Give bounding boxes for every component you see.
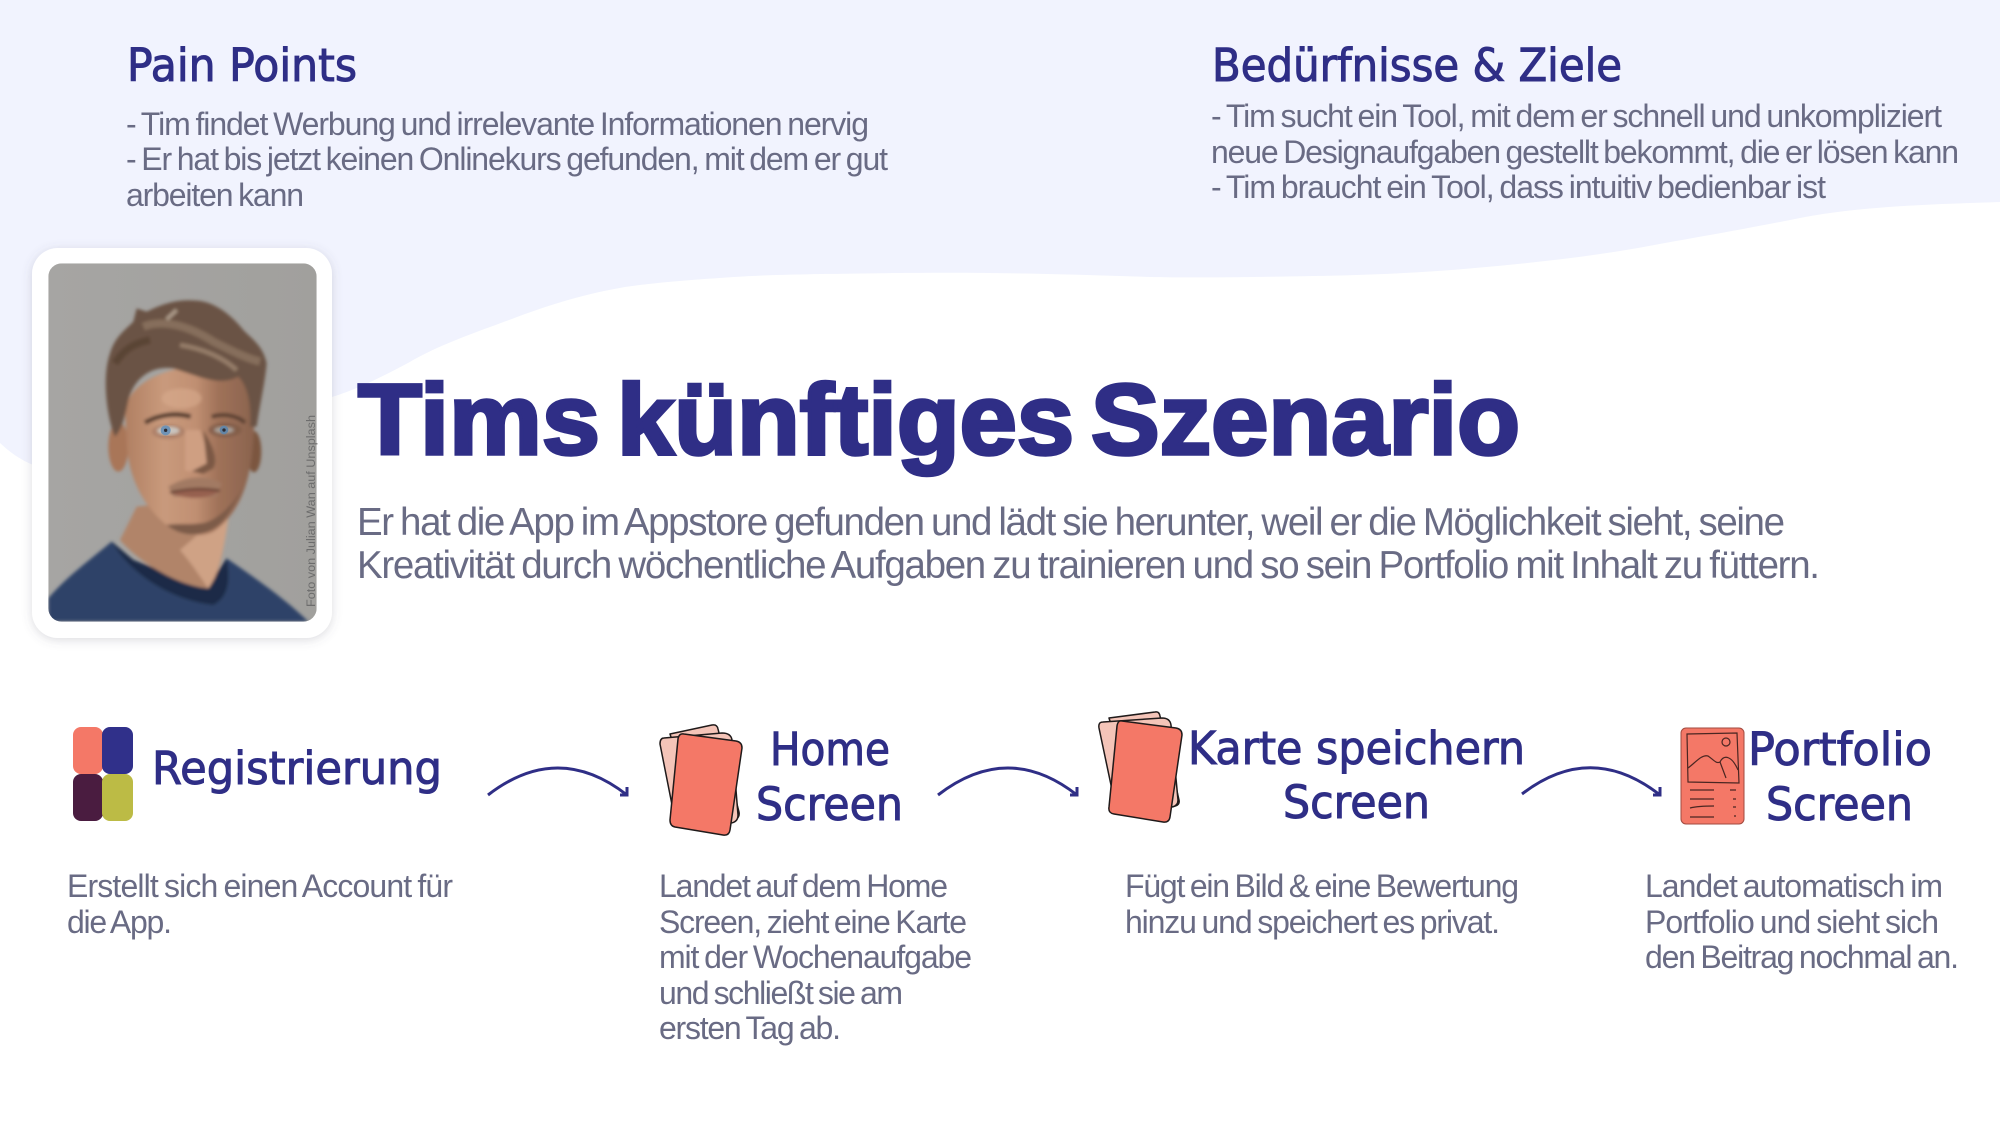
persona photo card [32,248,332,638]
step 1: Registrierung [67,727,453,940]
title: künftiges [617,364,1074,476]
shirt [48,542,308,622]
heading: Home Screen: Home [770,723,890,776]
heading: pain points: Pain Points [127,39,357,92]
text block: needs and goals: neue Designaufgaben gestellt bekommt, die er lösen kann [1211,134,1959,170]
icon: card stack [1099,712,1182,822]
description: Landet automatisch im [1645,868,1943,904]
description: Fügt ein Bild & eine Bewertung [1125,868,1519,904]
eyes [157,426,234,435]
forehead light [162,388,202,408]
heading: Portfolio Screen [1748,723,1932,831]
ears [108,422,128,472]
description: mit der Wochenaufgabe [659,939,972,975]
heading: Karte speichern Screen: Karte speichern [1188,722,1525,775]
text block: pain points: - Er hat bis jetzt keinen Onlinekurs gefunden, mit dem er gut [126,141,888,177]
description: Landet auf dem Home [659,868,948,904]
step 4: Portfolio Screen [1645,723,1959,975]
stubble and jaw shadow [166,498,238,536]
panel: needs and goals [1211,39,1959,205]
text block: needs and goals: - Tim braucht ein Tool, dass intuitiv bedienbar ist [1211,169,1826,205]
heading: Karte speichern Screen [1188,722,1525,829]
background wave [0,0,2000,470]
arrow 3 [1522,768,1660,795]
heading: Portfolio Screen: Portfolio [1748,723,1932,776]
description [659,868,972,1046]
description: den Beitrag nochmal an. [1645,939,1959,975]
text block: pain points [126,106,888,213]
icon: portfolio phone [1681,728,1744,824]
text block: pain points: arbeiten kann [126,177,304,213]
description: die App. [67,904,172,940]
face [125,367,254,536]
neck [119,504,222,592]
photo: portrait of Tim [48,263,317,622]
step 3: Karte speichern Screen [1099,712,1525,940]
heading: Home Screen: Screen [756,778,903,831]
icon: card stack [660,725,742,835]
title [358,364,1520,476]
heading: Home Screen [756,723,903,831]
scenario description: Er hat die App im Appstore gefunden und lädt sie herunter, weil er die Möglichkeit sieht, seine [357,501,1785,544]
panel: pain points [126,39,888,213]
heading: Portfolio Screen: Screen [1766,778,1913,831]
scenario description [357,501,1820,587]
arrow 1 [488,768,627,795]
arrow 2 [938,768,1077,795]
photo credit: Foto von Julian Wan auf Unsplash [306,415,318,607]
description: Erstellt sich einen Account für [67,868,453,904]
description: und schließt sie am [659,975,903,1011]
mouth [174,488,218,499]
description [67,868,453,940]
text block: needs and goals: - Tim sucht ein Tool, mit dem er schnell und unkompliziert [1211,98,1942,134]
description: ersten Tag ab. [659,1010,841,1046]
title: Szenario [1091,364,1520,476]
icon: four coloured tiles [73,727,133,821]
description: Portfolio und sieht sich [1645,904,1939,940]
eye sockets [152,424,185,439]
description: Screen, zieht eine Karte [659,904,967,940]
description [1645,868,1959,975]
text block: pain points: - Tim findet Werbung und irrelevante Informationen nervig [126,106,869,142]
text block: needs and goals [1211,98,1959,205]
hair [106,300,267,437]
description [1125,868,1519,940]
heading: Registrierung: Registrierung [152,742,442,795]
title: Tims [358,364,600,476]
scenario description: Kreativität durch wöchentliche Aufgaben zu trainieren und so sein Portfolio mit Inhalt zu füttern. [357,544,1820,587]
heading: needs and goals: Bedürfnisse & Ziele [1212,39,1622,92]
step 2: Home Screen [659,723,972,1046]
nose [185,430,208,472]
eyebrows [145,415,191,423]
heading: Karte speichern Screen: Screen [1283,776,1430,829]
description: hinzu und speichert es privat. [1125,904,1500,940]
